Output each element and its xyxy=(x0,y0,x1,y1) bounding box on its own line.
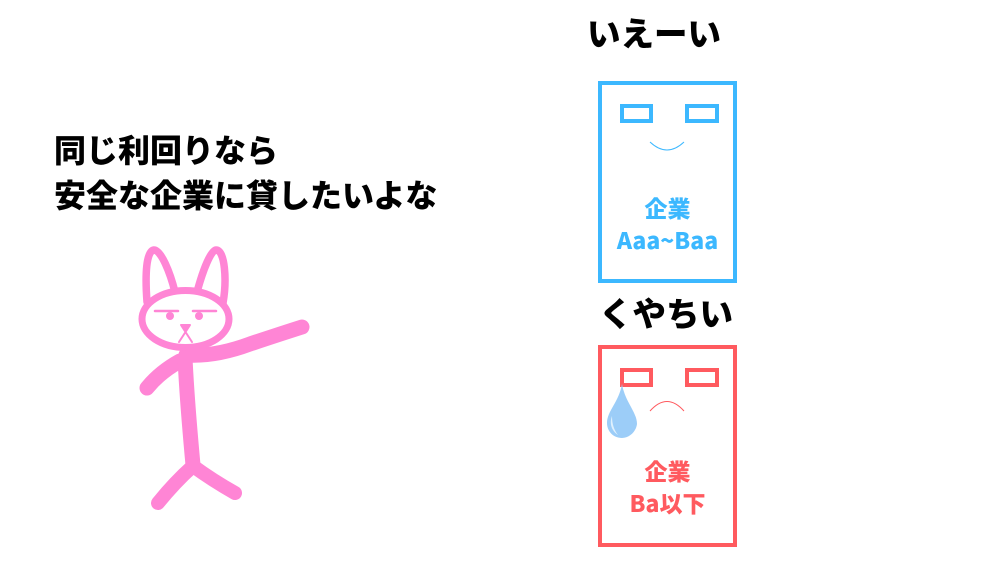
speech text: 同じ利回りなら xyxy=(54,126,278,172)
nose and mouth xyxy=(179,325,192,342)
company label: Ba以下 xyxy=(630,485,705,519)
right leg xyxy=(193,466,235,493)
company label: 企業 xyxy=(644,453,690,487)
frown xyxy=(650,402,684,411)
eyes xyxy=(622,106,717,121)
company label xyxy=(630,453,705,519)
company label xyxy=(616,190,718,256)
heading: frustrated: くやちい xyxy=(599,287,733,336)
speech text: 安全な企業に貸したいよな xyxy=(54,171,437,217)
company label: Aaa~Baa xyxy=(616,222,718,256)
panel: highly rated company xyxy=(600,83,735,281)
company label: 企業 xyxy=(644,190,690,224)
left leg xyxy=(158,466,193,503)
left ear xyxy=(146,250,175,302)
eyes xyxy=(155,311,216,320)
smile xyxy=(650,142,684,150)
eyes xyxy=(622,370,717,385)
icon: tear drop xyxy=(607,384,637,438)
speech text xyxy=(54,126,437,217)
card border xyxy=(600,83,735,281)
body xyxy=(185,358,193,465)
head xyxy=(142,290,229,348)
character: pink stick figure rabbit xyxy=(142,250,302,503)
panel: low rated company xyxy=(600,347,735,545)
heading: happy: いえーい xyxy=(587,7,721,56)
card border xyxy=(600,347,735,545)
pointing arm xyxy=(186,327,302,355)
right ear xyxy=(197,250,225,303)
left arm xyxy=(147,361,180,388)
